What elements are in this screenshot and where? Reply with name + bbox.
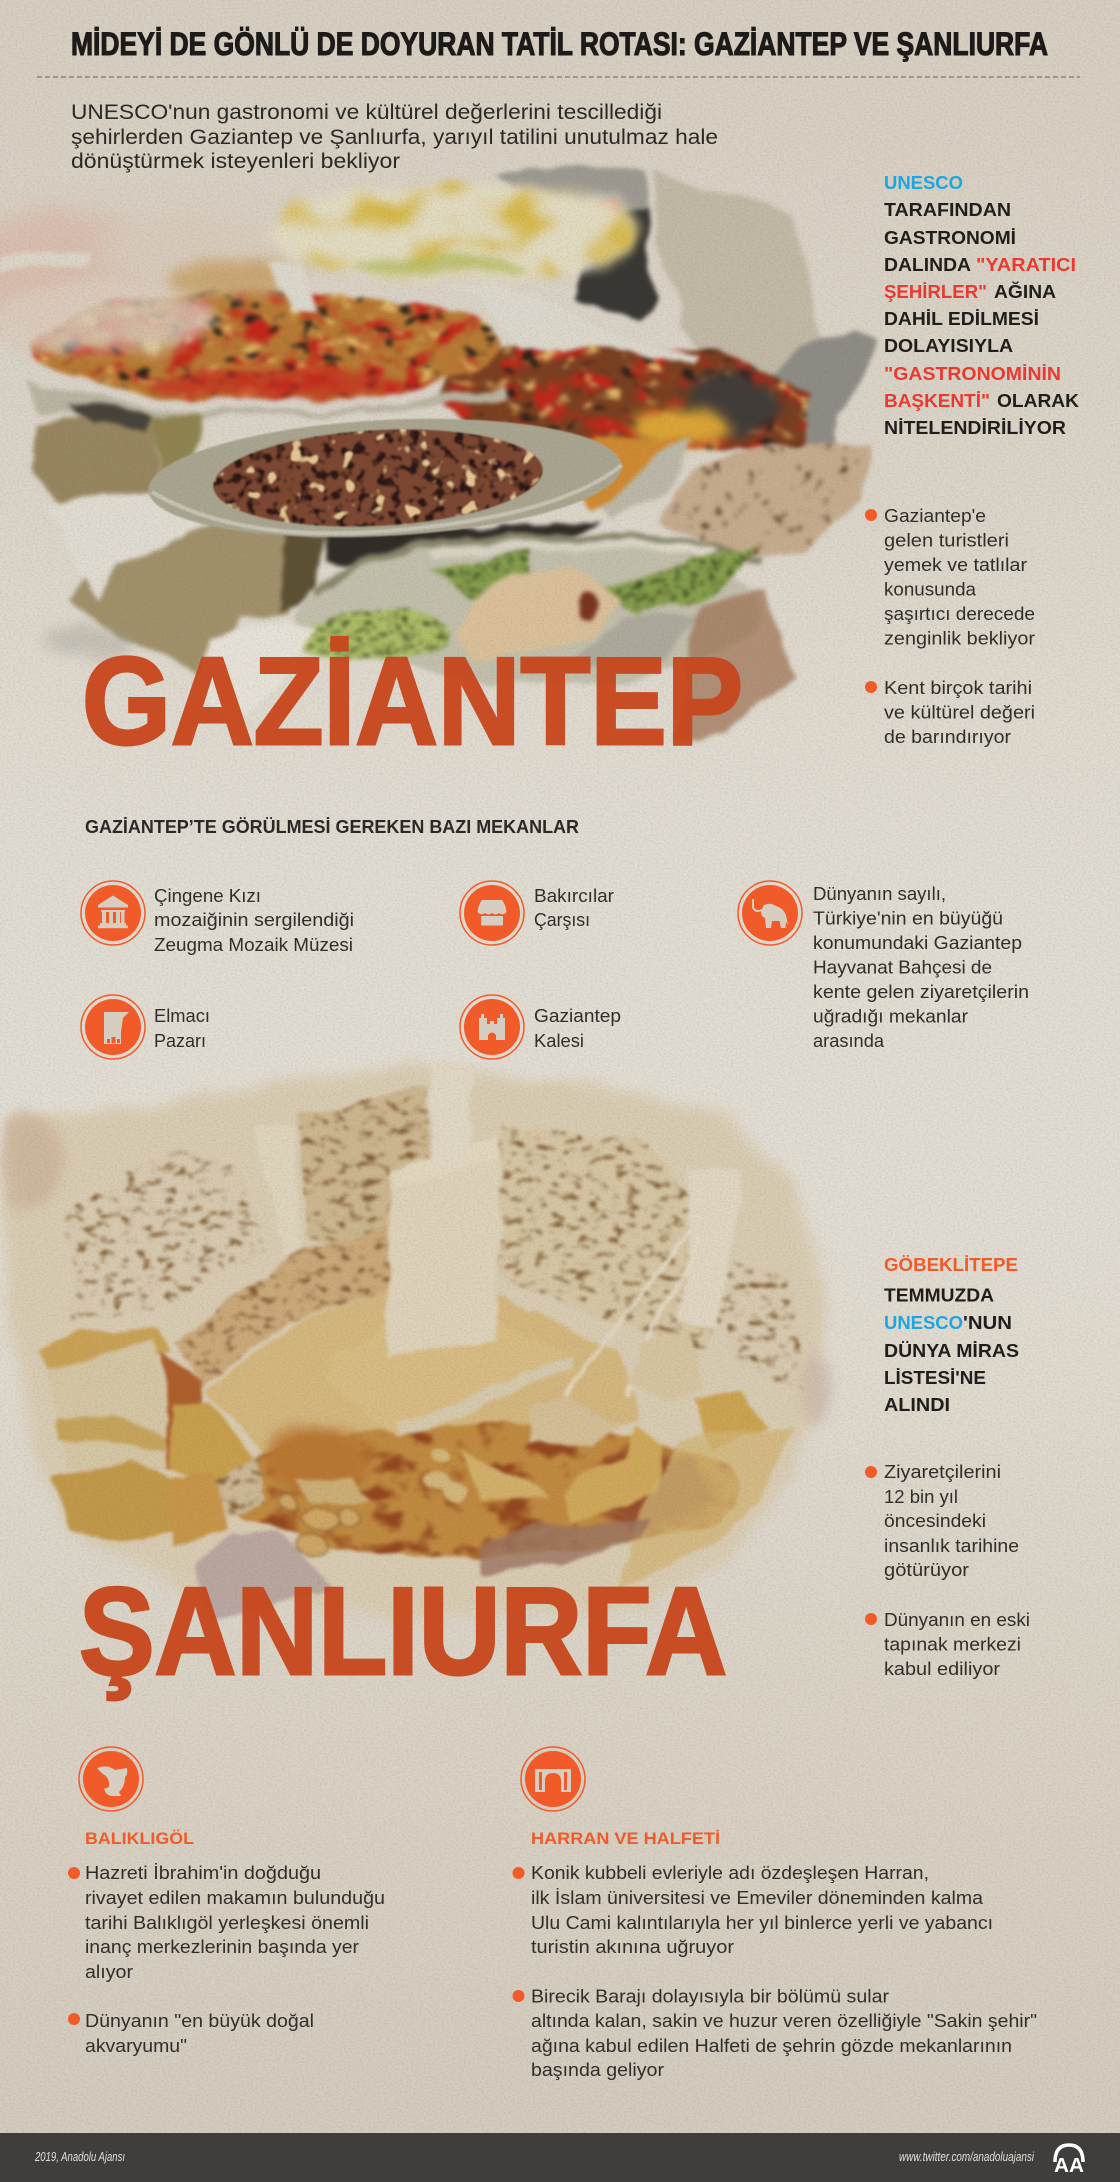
heading: Balıklıgöl: BALIKLIGÖL — [85, 1829, 194, 1848]
place: Zoo: kente gelen ziyaretçilerin — [813, 981, 1029, 1002]
place: Bakırcılar: Çarşısı — [534, 909, 590, 930]
bullets: Gaziantep facts — [865, 505, 1035, 747]
mauve upper-left — [0, 1110, 60, 1210]
floor — [205, 1290, 640, 1480]
mauve right — [799, 1354, 831, 1426]
back wall right — [500, 1125, 730, 1350]
callout: Göbeklitepe: LİSTESİ'NE — [884, 1368, 986, 1388]
front layer of photo — [45, 535, 790, 745]
grey wash bottom-left — [45, 626, 135, 654]
callout: Göbeklitepe: ALINDI — [884, 1395, 950, 1415]
bullets: Göbeklitepe facts: insanlık tarihine — [884, 1535, 1019, 1556]
salad plate — [295, 538, 765, 682]
bullets: Göbeklitepe facts: Dünyanın en eski — [884, 1609, 1030, 1630]
place: Zoo — [738, 881, 1029, 1051]
intro text — [71, 101, 718, 173]
green pastry edge — [350, 260, 530, 276]
panel: Harran ve Halfeti: ilk İslam üniversitesi ve Emeviler döneminden kalma — [531, 1887, 984, 1908]
icon: vendor with pots — [81, 995, 145, 1059]
dark under rim — [70, 404, 150, 432]
gold floor patch — [265, 1426, 375, 1494]
panel: Harran ve Halfeti: Ulu Cami kalıntılarıyla her yıl binlerce yerli ve yabancı — [531, 1912, 993, 1933]
wash base — [5, 1065, 830, 1620]
place: castle: Kalesi — [534, 1030, 584, 1051]
callout: Göbeklitepe: UNESCO — [884, 1313, 963, 1333]
top pillar — [433, 1062, 470, 1172]
purple stone bottom-left — [195, 1535, 340, 1620]
green herbs — [430, 548, 530, 600]
wash: pink left — [0, 210, 280, 340]
bullets: Gaziantep facts: yemek ve tatlılar — [884, 554, 1027, 575]
callout: Göbeklitepe: 'NUN — [963, 1313, 1012, 1333]
green herbs right — [590, 545, 760, 615]
callout: Göbeklitepe: TEMMUZDA — [884, 1286, 994, 1306]
small brickwork — [215, 1455, 268, 1515]
dark-red patch — [590, 1452, 710, 1528]
intro text: şehirlerden Gaziantep ve Şanlıurfa, yarıyıl tatilini unutulmaz hale — [71, 126, 718, 149]
callout: UNESCO gastronomy: AĞINA — [994, 281, 1056, 302]
place: Zeugma: Çingene Kızı — [154, 885, 261, 906]
gold slab — [170, 1400, 255, 1480]
callout: UNESCO gastronomy: "YARATICI — [976, 255, 1076, 275]
place: Zoo: Türkiye'nin en büyüğü — [813, 908, 1003, 928]
orange bowl — [570, 440, 690, 510]
panel: Balıklıgöl — [68, 1747, 385, 2056]
callout: Göbeklitepe: DÜNYA MİRAS — [884, 1341, 1019, 1361]
white fork smear — [270, 262, 320, 312]
bullets: Gaziantep facts: ve kültürel değeri — [884, 702, 1035, 722]
flat slab — [300, 1475, 370, 1505]
callout: UNESCO gastronomy: NİTELENDİRİLİYOR — [884, 418, 1066, 438]
panel: Harran ve Halfeti: Birecik Barajı dolayısıyla bir bölümü sular — [531, 1986, 889, 2006]
yellow pastry platter — [270, 182, 640, 282]
left pillar — [252, 1130, 302, 1255]
pale rim light — [430, 544, 720, 555]
bullets: Göbeklitepe facts: 12 bin yıl — [884, 1486, 958, 1507]
panel: Harran ve Halfeti: ağına kabul edilen Halfeti de şehrin gözde mekanlarının — [531, 2035, 1012, 2056]
panel: Harran ve Halfeti: altında kalan, sakin ve huzur veren özelliğiyle "Sakin şehir" — [531, 2010, 1037, 2031]
footer — [0, 2133, 1120, 2182]
red food — [30, 289, 500, 401]
white cloth left — [48, 495, 215, 600]
bullets: Gaziantep facts: gelen turistleri — [884, 530, 1009, 550]
support poles — [557, 1232, 700, 1405]
pale food top — [165, 258, 305, 298]
crescent boulder — [565, 1425, 665, 1527]
bullets: Gaziantep facts: Gaziantep'e — [884, 505, 986, 526]
red centre — [150, 369, 400, 399]
back layer of photo — [0, 165, 880, 680]
icon: museum — [81, 881, 145, 945]
place: Zeugma — [81, 881, 354, 955]
place: Elmacı: Pazarı — [154, 1030, 206, 1051]
pale grey bowl — [560, 610, 700, 670]
heading: Harran ve Halfeti: HARRAN VE HALFETİ — [531, 1829, 720, 1848]
twitter url: www.twitter.com/anadoluajansi — [899, 2150, 1035, 2164]
panel: Harran ve Halfeti: Konik kubbeli evleriyle adı özdeşleşen Harran, — [531, 1862, 929, 1883]
bullets: Gaziantep facts: şaşırtıcı derecede — [884, 603, 1035, 624]
white strip left — [0, 255, 90, 269]
place: castle — [460, 995, 621, 1059]
olive shadow — [35, 410, 155, 505]
grey bowl — [600, 440, 690, 520]
credit: 2019, Anadolu Ajansı — [34, 2150, 125, 2164]
left gold slab top — [38, 1330, 170, 1400]
left stone block — [42, 1340, 168, 1470]
bullets: Gaziantep facts: Kent birçok tarihi — [884, 677, 1032, 698]
callout: UNESCO gastronomy: BAŞKENTİ" — [884, 391, 990, 411]
callout: UNESCO gastronomy: TARAFINDAN — [884, 200, 1011, 220]
red highlight — [584, 204, 616, 220]
light rocks — [525, 1395, 620, 1445]
brown wash — [670, 590, 790, 745]
bullets: Göbeklitepe facts: tapınak merkezi — [884, 1634, 1021, 1654]
place: Zeugma: Zeugma Mozaik Müzesi — [154, 934, 353, 955]
icon: arch gate — [521, 1747, 585, 1811]
bullets: Gaziantep facts: konusunda — [884, 578, 977, 600]
callout: UNESCO gastronomy: DOLAYISIYLA — [884, 336, 1013, 356]
intro text: UNESCO'nun gastronomi ve kültürel değerlerini tescillediği — [71, 101, 662, 124]
place: Elmacı — [81, 995, 210, 1059]
logo: AA — [1054, 2145, 1084, 2177]
gold lump — [170, 1470, 225, 1550]
place: Bakırcılar — [460, 881, 614, 945]
city name: Şanlıurfa: ŞANLIURFA — [79, 1563, 727, 1701]
place: Elmacı: Elmacı — [154, 1005, 210, 1026]
icon: castle — [460, 995, 524, 1059]
mauve bottom — [480, 1520, 650, 1575]
heading: places to see: GAZİANTEP’TE GÖRÜLMESİ GEREKEN BAZI MEKANLAR — [85, 817, 579, 837]
right wall end — [725, 1260, 800, 1390]
panel: Balıklıgöl: alıyor — [85, 1961, 133, 1982]
panel: Balıklıgöl: inanç merkezlerinin başında yer — [85, 1936, 359, 1957]
central pillar — [386, 1135, 500, 1360]
olive cloth — [70, 520, 290, 680]
boulder slab — [463, 1445, 545, 1500]
place: Bakırcılar: Bakırcılar — [534, 885, 614, 906]
place: Zeugma: mozaiğinin sergilendiği — [154, 909, 354, 930]
bullets: Göbeklitepe facts: öncesindeki — [884, 1510, 986, 1531]
bullets: Göbeklitepe facts — [865, 1461, 1030, 1679]
city name: Gaziantep: GAZİANTEP — [82, 633, 743, 771]
icon: market stall — [460, 881, 524, 945]
panel: Balıklıgöl: Hazreti İbrahim'in doğduğu — [85, 1862, 321, 1883]
platform — [330, 1320, 575, 1442]
right gold wash — [620, 1425, 790, 1590]
bullets: Göbeklitepe facts: kabul ediliyor — [884, 1658, 1000, 1679]
gold stripe on block — [55, 1415, 165, 1450]
bread — [660, 445, 870, 555]
green left — [300, 607, 450, 663]
panel: Balıklıgöl: akvaryumu" — [85, 2035, 187, 2056]
callout: UNESCO gastronomy: DALINDA — [884, 255, 971, 275]
dark stand — [280, 535, 325, 610]
photo: Göbeklitepe excavation — [0, 1062, 831, 1620]
callout: UNESCO gastronomy: GASTRONOMİ — [884, 228, 1016, 248]
logo: AA: AA — [1054, 2155, 1084, 2177]
wash: tan right — [650, 175, 830, 400]
icon: fish — [79, 1747, 143, 1811]
bullets: Göbeklitepe facts: Ziyaretçilerini — [884, 1461, 1001, 1482]
icon: elephant — [738, 881, 802, 945]
callout: UNESCO gastronomy: UNESCO — [884, 173, 963, 193]
callout: UNESCO gastronomy: ŞEHİRLER" — [884, 282, 987, 302]
pillar cap — [386, 1135, 500, 1190]
panel: Harran ve Halfeti — [512, 1747, 1037, 2080]
pebble group — [424, 1448, 470, 1502]
lower-left gold — [55, 1460, 210, 1540]
panel: Balıklıgöl: Dünyanın "en büyük doğal — [85, 2010, 314, 2031]
pale food fade upper-left — [0, 282, 210, 354]
salad plate rim — [310, 535, 765, 590]
panel: Harran ve Halfeti: başında geliyor — [531, 2059, 664, 2080]
place: Zoo: Dünyanın sayılı, — [813, 883, 946, 904]
right grey wash — [730, 330, 880, 455]
beige meat — [455, 565, 620, 660]
yellow highlights — [628, 408, 732, 448]
dark background behind pastry — [570, 210, 655, 320]
lower ring wall — [175, 1225, 390, 1385]
centre plate with meat — [145, 408, 625, 548]
place: castle: Gaziantep — [534, 1005, 621, 1026]
bullets: Gaziantep facts: zenginlik bekliyor — [884, 628, 1035, 648]
pebbles — [282, 1496, 355, 1556]
slab right — [695, 1392, 765, 1455]
rust accent — [576, 595, 596, 625]
panel: Balıklıgöl: rivayet edilen makamın bulunduğu — [85, 1887, 385, 1908]
wash: grey top — [495, 165, 650, 215]
panel: Harran ve Halfeti: turistin akınına uğruyor — [531, 1936, 734, 1957]
meat — [211, 421, 545, 535]
intro text: dönüştürmek isteyenleri bekliyor — [71, 150, 400, 173]
panel: Balıklıgöl: tarihi Balıklıgöl yerleşkesi önemli — [85, 1912, 369, 1933]
bullets: Gaziantep facts: de barındırıyor — [884, 726, 1011, 747]
dark shadows — [680, 371, 780, 439]
place: Zoo: Hayvanat Bahçesi de — [813, 956, 992, 978]
rust floor — [220, 1424, 740, 1556]
left rubble — [70, 1150, 265, 1320]
callout: UNESCO gastronomy — [884, 173, 1079, 438]
place: Zoo: uğradığı mekanlar — [813, 1006, 968, 1026]
plate rim highlight — [152, 465, 622, 533]
white cloth lower — [200, 620, 320, 720]
stacked rocks — [628, 1335, 705, 1405]
callout: Göbeklitepe: GÖBEKLİTEPE — [884, 1255, 1018, 1275]
callout: UNESCO gastronomy: DAHİL EDİLMESİ — [884, 309, 1039, 329]
platform edge — [395, 1352, 575, 1442]
stand pillar — [150, 412, 205, 480]
callout: UNESCO gastronomy: "GASTRONOMİNİN — [884, 364, 1061, 384]
place: Zoo: konumundaki Gaziantep — [813, 932, 1022, 953]
bullets: Göbeklitepe facts: götürüyor — [884, 1559, 969, 1580]
plate rim — [22, 380, 505, 418]
back wall left — [295, 1085, 430, 1250]
place: Zoo: arasında — [813, 1030, 885, 1051]
grey platter strip — [440, 285, 700, 362]
photo: Gaziantep food platters — [0, 165, 880, 745]
dark under plate — [325, 520, 600, 575]
callout: UNESCO gastronomy: OLARAK — [997, 391, 1079, 411]
right pillar — [680, 1165, 745, 1330]
rust — [160, 1352, 205, 1475]
callout: Göbeklitepe — [884, 1255, 1019, 1415]
dark red second platter — [440, 345, 815, 452]
